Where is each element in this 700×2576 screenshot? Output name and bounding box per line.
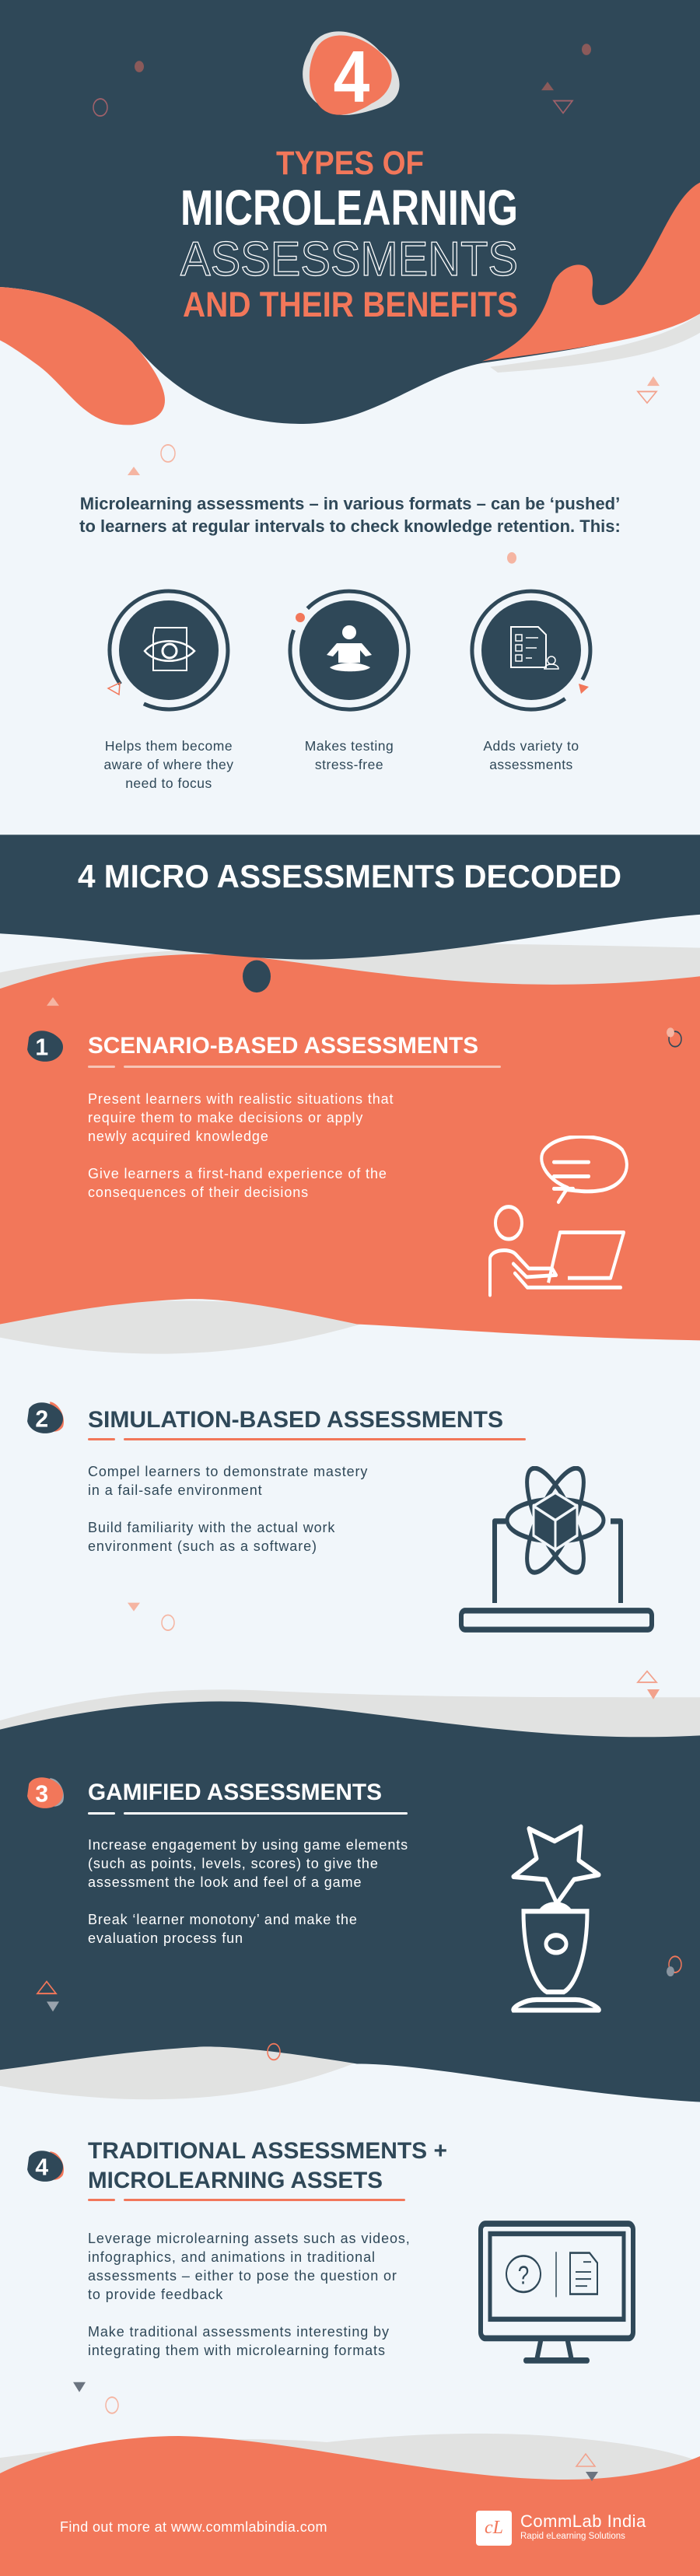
badge 1	[27, 1031, 63, 1062]
text	[88, 2231, 411, 2358]
text: (such as points, levels, scores) to give the	[88, 1856, 379, 1871]
text	[88, 1091, 394, 1200]
icon: person with laptop	[488, 1136, 628, 1297]
number 4 blob	[303, 31, 400, 117]
logo: CommLab India	[520, 2511, 646, 2531]
badge 4	[27, 2151, 64, 2182]
heading: TRADITIONAL ASSESSMENTS +	[88, 2138, 447, 2164]
logo: Rapid eLearning Solutions	[520, 2532, 625, 2541]
caption 3: Adds variety to	[483, 738, 579, 754]
caption 3	[483, 738, 579, 772]
text: assessment the look and feel of a game	[88, 1874, 362, 1890]
caption 2: stress-free	[315, 757, 383, 772]
icon: monitor: ?	[518, 2262, 529, 2290]
caption 1: Helps them become	[105, 738, 233, 754]
icon: laptop with cube	[459, 1466, 654, 1633]
text: Leverage microlearning assets such as videos,	[88, 2231, 411, 2246]
badge 1: 1	[35, 1034, 48, 1060]
footer waves	[0, 2434, 700, 2576]
caption 1	[103, 738, 234, 791]
text: to provide feedback	[88, 2287, 223, 2302]
intro text	[79, 494, 621, 536]
text: infographics, and animations in traditional	[88, 2249, 376, 2265]
text: Compel learners to demonstrate mastery	[88, 1464, 368, 1479]
text: Present learners with realistic situations that	[88, 1091, 394, 1107]
heading: SIMULATION-BASED ASSESSMENTS	[88, 1407, 503, 1433]
section heading: 4 MICRO ASSESSMENTS DECODED	[78, 858, 621, 894]
icon: checklist	[472, 591, 590, 709]
text: consequences of their decisions	[88, 1185, 309, 1200]
caption 3: assessments	[489, 757, 573, 772]
badge 4: 4	[35, 2154, 48, 2180]
text: Build familiarity with the actual work	[88, 1520, 335, 1535]
panel: traditional	[27, 2138, 447, 2358]
badge 3: 3	[35, 1781, 48, 1807]
title: TYPES OF	[276, 145, 424, 182]
heading: SCENARIO-BASED ASSESSMENTS	[88, 1033, 478, 1059]
text: Break ‘learner monotony’ and make the	[88, 1912, 358, 1927]
caption 1: aware of where they	[103, 757, 234, 772]
panel: scenario-based	[27, 1031, 501, 1200]
footer text: Find out more at www.commlabindia.com	[60, 2519, 327, 2535]
caption 2	[305, 738, 394, 772]
panel: simulation-based	[27, 1402, 526, 1554]
intro text: Microlearning assessments – in various formats – can be ‘pushed’	[80, 494, 620, 513]
text: Give learners a first-hand experience of the	[88, 1166, 387, 1181]
panel: gamified	[27, 1777, 408, 1946]
benefit icons	[107, 590, 593, 712]
icon: meditation	[290, 591, 408, 709]
text	[88, 1464, 368, 1554]
text: assessments – either to pose the question or	[88, 2268, 397, 2284]
icon: eye document	[108, 591, 228, 709]
text: integrating them with microlearning formats	[88, 2343, 386, 2358]
icon: monitor	[478, 2221, 635, 2364]
text: require them to make decisions or apply	[88, 1110, 363, 1125]
heading: GAMIFIED ASSESSMENTS	[88, 1780, 382, 1805]
logo: cL	[485, 2518, 503, 2538]
text: evaluation process fun	[88, 1930, 243, 1946]
heading: MICROLEARNING ASSETS	[88, 2168, 383, 2193]
title	[180, 145, 518, 324]
text: in a fail-safe environment	[88, 1482, 263, 1498]
text	[88, 1837, 408, 1946]
text: environment (such as a software)	[88, 1538, 317, 1554]
logo	[476, 2511, 646, 2546]
text: newly acquired knowledge	[88, 1129, 269, 1144]
icon: trophy	[511, 1825, 601, 2013]
heading	[88, 2138, 447, 2193]
caption 1: need to focus	[125, 775, 212, 791]
intro text: to learners at regular intervals to check knowledge retention. This:	[79, 516, 621, 536]
caption 2: Makes testing	[305, 738, 394, 754]
badge 2: 2	[35, 1406, 48, 1432]
text: Increase engagement by using game elements	[88, 1837, 408, 1853]
text: Make traditional assessments interesting by	[88, 2324, 390, 2340]
number 4 blob: 4	[334, 35, 370, 117]
badge 2	[27, 1402, 64, 1433]
badge 3	[27, 1777, 64, 1808]
